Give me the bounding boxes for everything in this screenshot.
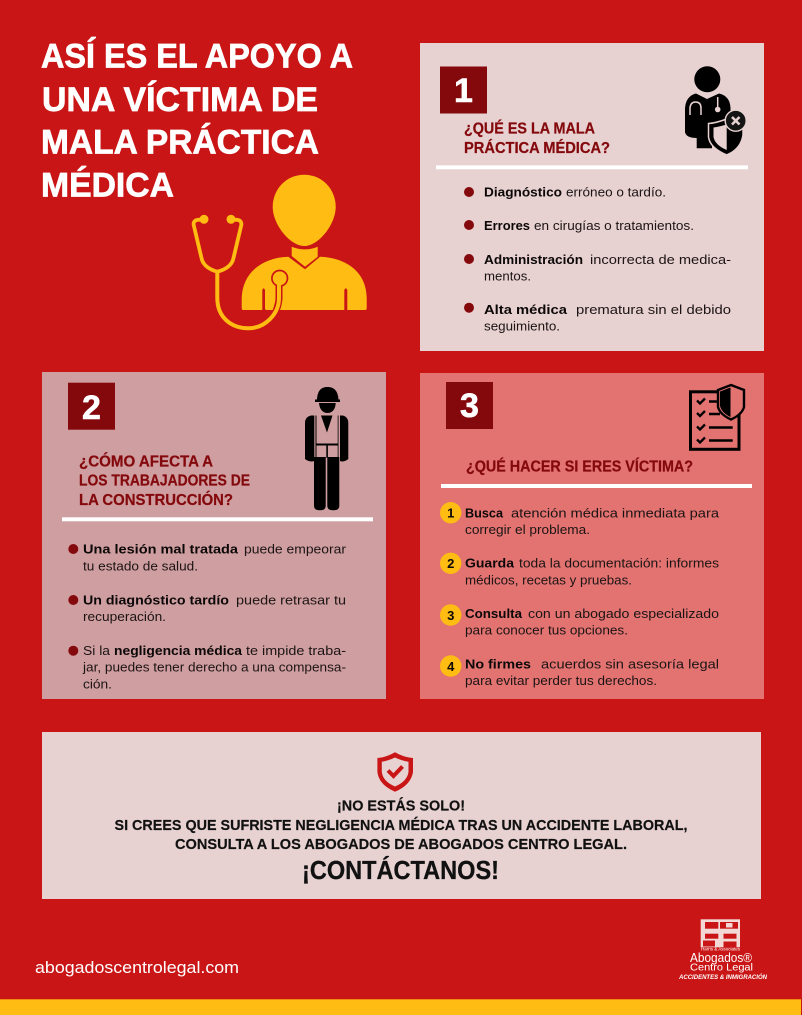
heading: LOS TRABAJADORES DE — [79, 473, 250, 490]
call to action text: SI CREES QUE SUFRISTE NEGLIGENCIA MÉDICA TRAS UN ACCIDENTE LABORAL, — [114, 817, 688, 834]
numbered steps: corregir el problema. — [465, 522, 590, 537]
bullet list — [464, 185, 731, 334]
heading: ¿QUÉ HACER SI ERES VÍCTIMA? — [466, 457, 693, 476]
numbered steps: para evitar perder tus derechos. — [465, 673, 657, 688]
icon: doctor and shield — [685, 66, 746, 155]
numbered steps: No firmes — [465, 656, 531, 671]
bullet list: puede retrasar tu — [236, 592, 346, 607]
call to action text: ¡CONTÁCTANOS! — [302, 855, 499, 885]
heading: ¿CÓMO AFECTA A — [79, 452, 213, 471]
panel: qué hacer si eres víctima — [420, 373, 764, 699]
numbered steps: 1 — [447, 505, 454, 520]
bullet list — [68, 542, 347, 691]
numbered steps: acuerdos sin asesoría legal — [541, 656, 719, 671]
bullet list: Alta médica — [484, 302, 568, 317]
bullet list: tu estado de salud. — [83, 559, 198, 574]
call to action text — [114, 798, 688, 885]
icon: shield with check — [377, 752, 413, 792]
number badge 2 — [68, 383, 115, 430]
bullet list: Una lesión mal tratada — [83, 542, 239, 557]
bullet list: te impide traba- — [246, 643, 346, 658]
bullet list: negligencia médica — [114, 643, 243, 658]
bullet list: Errores — [484, 218, 530, 233]
bullet list: jar, puedes tener derecho a una compensa- — [82, 660, 346, 675]
heading — [464, 119, 610, 157]
bottom yellow bar — [0, 999, 801, 1015]
number badge 1: 1 — [454, 72, 473, 110]
bullet list: mentos. — [484, 269, 531, 284]
heading: ¿QUÉ ES LA MALA — [464, 119, 595, 138]
logo: Abogados Centro Legal: ACCIDENTES & INMIGRACIÓN — [678, 972, 767, 981]
title: MÉDICA — [41, 167, 174, 205]
title: ASÍ ES EL APOYO A — [41, 38, 353, 76]
logo: Abogados Centro Legal: Abogados® — [690, 950, 752, 965]
panel: call to action — [42, 732, 761, 899]
numbered steps: 3 — [447, 608, 454, 623]
number badge 1 — [440, 66, 487, 114]
numbered steps — [440, 502, 720, 688]
icon: doctor with stethoscope — [194, 175, 367, 328]
numbered steps: 4 — [447, 659, 455, 674]
bullet list: ción. — [83, 676, 112, 691]
numbered steps: Busca — [465, 505, 504, 520]
bullet list: recuperación. — [83, 609, 166, 624]
bullet list: Diagnóstico — [484, 185, 562, 200]
heading: LA CONSTRUCCIÓN? — [79, 490, 233, 509]
logo: Abogados Centro Legal: Harris & Associates — [701, 947, 741, 952]
numbered steps: con un abogado especializado — [528, 606, 719, 621]
numbered steps: para conocer tus opciones. — [465, 623, 628, 638]
bullet list: en cirugías o tratamientos. — [534, 218, 694, 233]
panel: qué es la mala práctica — [420, 43, 764, 351]
numbered steps: 2 — [447, 556, 454, 571]
call to action text: ¡NO ESTÁS SOLO! — [337, 798, 465, 815]
logo: Abogados Centro Legal: Centro Legal — [690, 962, 753, 974]
logo: Abogados Centro Legal — [678, 919, 767, 981]
bullet list: prematura sin el debido — [576, 302, 731, 317]
number badge 3: 3 — [460, 387, 479, 425]
call to action text: CONSULTA A LOS ABOGADOS DE ABOGADOS CENTRO LEGAL. — [175, 836, 627, 853]
bullet list: erróneo o tardío. — [566, 185, 666, 200]
numbered steps: Consulta — [465, 606, 523, 621]
title — [41, 38, 353, 205]
bullet list: Administración — [484, 252, 583, 267]
icon: construction worker — [305, 387, 348, 510]
number badge 2: 2 — [82, 389, 101, 427]
title: MALA PRÁCTICA — [41, 124, 319, 162]
icon: checklist with shield — [690, 385, 745, 449]
bullet list: incorrecta de medica- — [590, 252, 731, 267]
title: UNA VÍCTIMA DE — [42, 81, 318, 119]
numbered steps: médicos, recetas y pruebas. — [465, 572, 632, 587]
numbered steps: atención médica inmediata para — [511, 505, 720, 520]
website url: abogadoscentrolegal.com — [35, 958, 239, 977]
numbered steps: toda la documentación: informes — [519, 556, 720, 571]
heading: PRÁCTICA MÉDICA? — [464, 138, 610, 157]
bullet list: Un diagnóstico tardío — [83, 592, 229, 607]
bullet list: Si la — [83, 643, 111, 658]
bullet list: puede empeorar — [244, 542, 347, 557]
panel: cómo afecta a los trabajadores — [42, 372, 386, 699]
number badge 3 — [446, 382, 493, 429]
bullet list: seguimiento. — [484, 319, 560, 334]
numbered steps: Guarda — [465, 556, 515, 571]
heading — [79, 452, 250, 509]
